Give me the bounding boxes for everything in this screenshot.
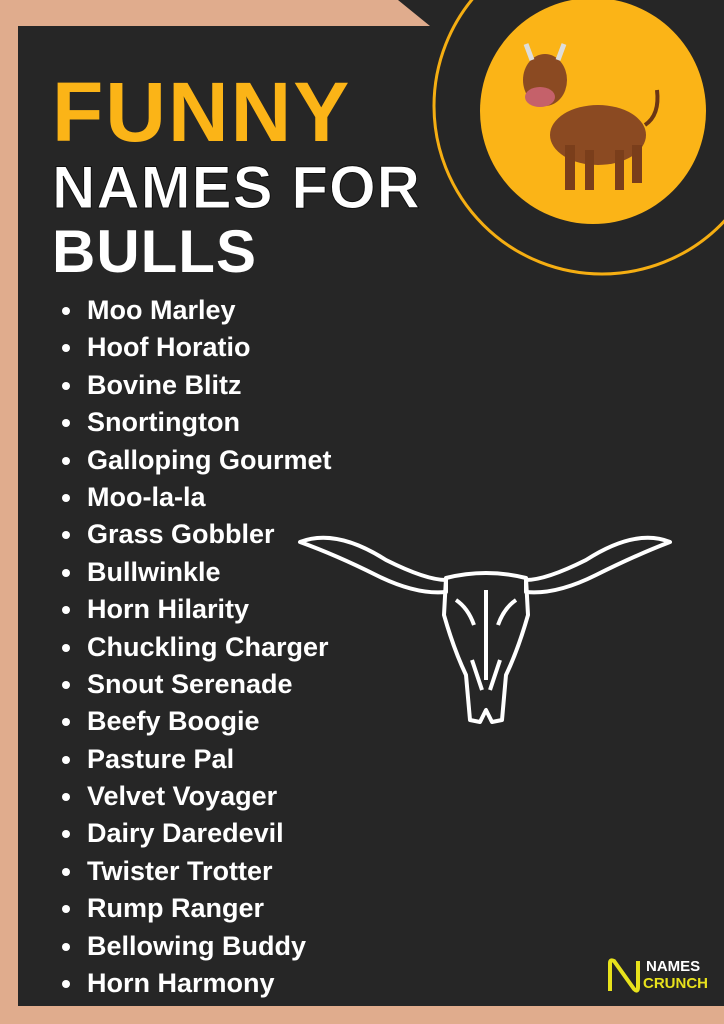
title: BULLS bbox=[52, 218, 257, 285]
list of names: Pasture Pal bbox=[87, 744, 234, 774]
list of names: Bovine Blitz bbox=[87, 370, 242, 400]
title: NAMES FOR bbox=[52, 154, 421, 221]
list of names: Moo Marley bbox=[87, 295, 236, 325]
list of names: Velvet Voyager bbox=[87, 781, 277, 811]
list of names: Beefy Boogie bbox=[87, 706, 260, 736]
icon: longhorn skull bbox=[298, 536, 672, 724]
list of names: Horn Hilarity bbox=[87, 594, 249, 624]
icon: ring and bull circle bbox=[432, 0, 724, 276]
logo: names crunch: NAMES bbox=[646, 958, 700, 975]
list of names: Galloping Gourmet bbox=[87, 445, 332, 475]
list of names: Moo-la-la bbox=[87, 482, 206, 512]
list of names: Horn Harmony bbox=[87, 968, 275, 998]
logo: names crunch: CRUNCH bbox=[643, 975, 708, 992]
title: FUNNY bbox=[52, 65, 351, 159]
list of names: Rump Ranger bbox=[87, 893, 264, 923]
logo: names crunch bbox=[608, 958, 708, 993]
list of names: Snout Serenade bbox=[87, 669, 293, 699]
list of names: Snortington bbox=[87, 407, 240, 437]
list of names: Chuckling Charger bbox=[87, 632, 329, 662]
list of names: Hoof Horatio bbox=[87, 332, 250, 362]
list of names: Bellowing Buddy bbox=[87, 931, 306, 961]
list of names bbox=[62, 295, 332, 998]
list of names: Bullwinkle bbox=[87, 557, 221, 587]
title bbox=[52, 65, 421, 285]
list of names: Dairy Daredevil bbox=[87, 818, 284, 848]
list of names: Grass Gobbler bbox=[87, 519, 275, 549]
list of names: Twister Trotter bbox=[87, 856, 273, 886]
